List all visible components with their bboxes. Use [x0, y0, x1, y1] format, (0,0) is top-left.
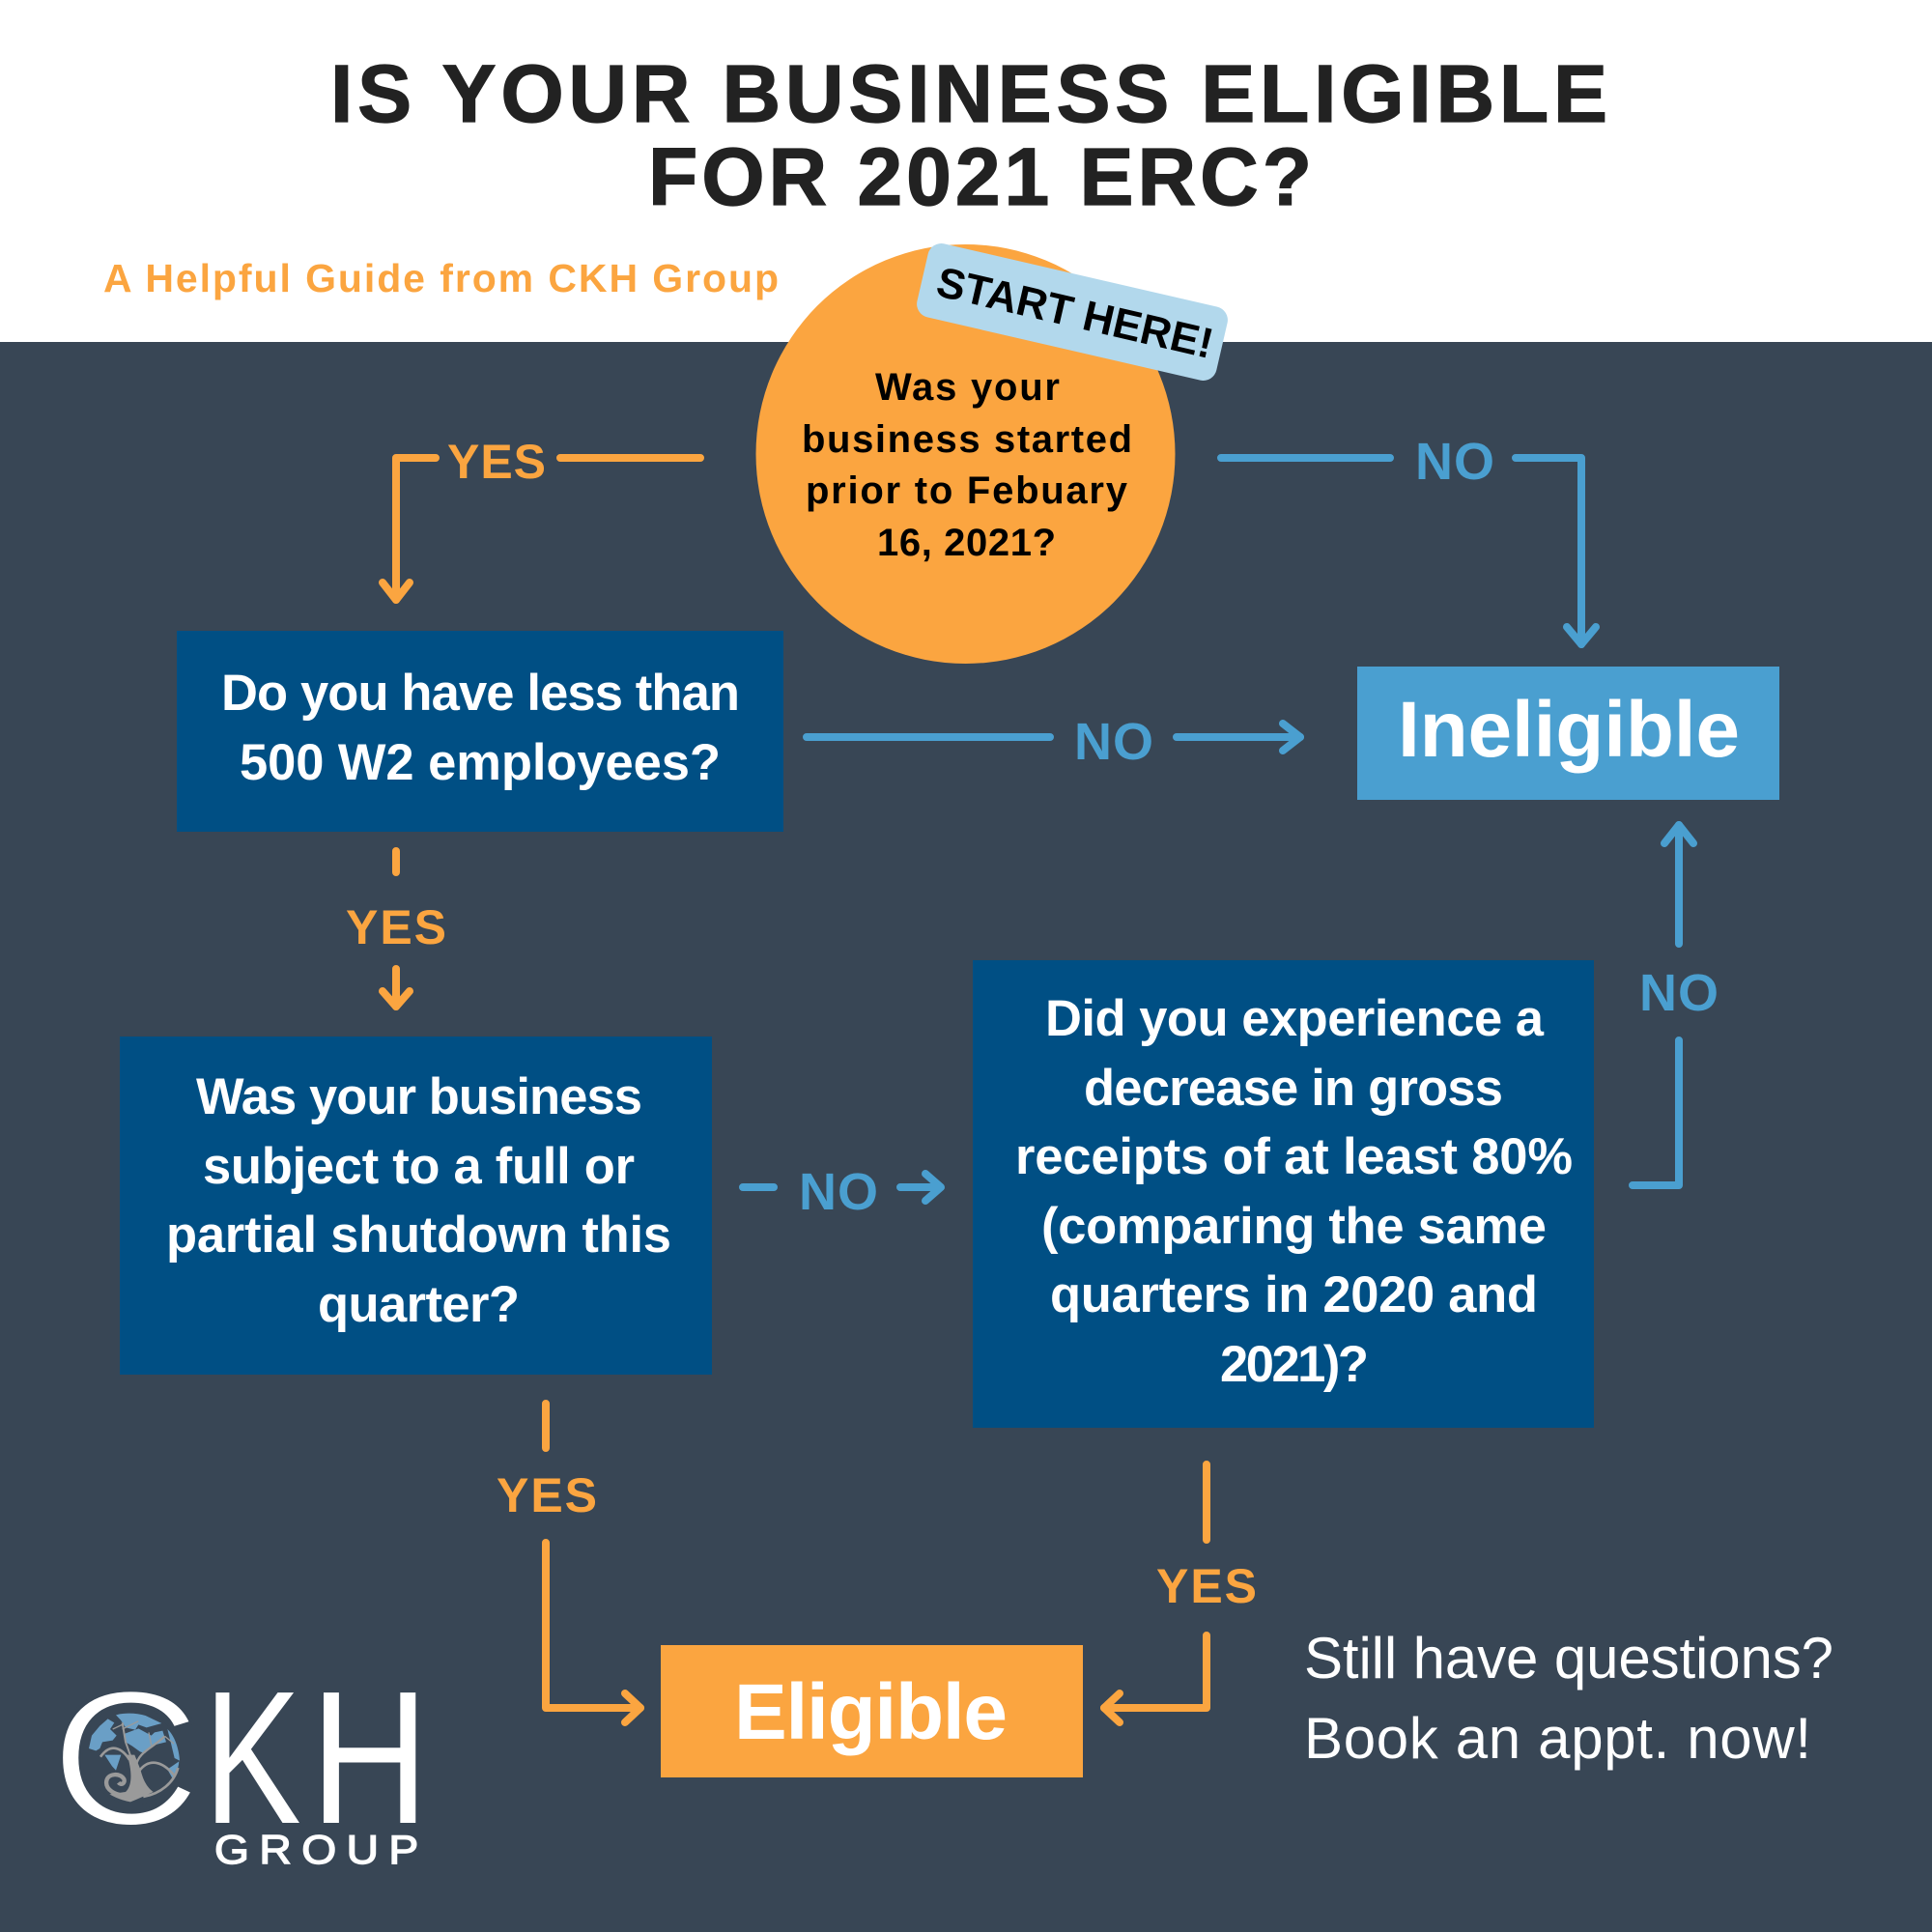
question box: employees: 500 W2 employees? [240, 734, 721, 791]
title: IS YOUR BUSINESS ELIGIBLE [330, 48, 1607, 139]
question box: gross receipts: quarters in 2020 and [1050, 1266, 1538, 1323]
CKH Group logo [50, 1651, 429, 1873]
arrow: no to ineligible from start [1221, 433, 1596, 644]
arrow: no to gross receipts question [743, 1163, 941, 1221]
arrow: no from employees to ineligible: NO [1074, 713, 1153, 771]
question box: shutdown: Was your business [196, 1068, 642, 1125]
question box: shutdown: quarter? [318, 1276, 520, 1333]
question box: gross receipts: (comparing the same [1041, 1198, 1547, 1255]
question box: gross receipts: decrease in gross [1084, 1060, 1503, 1117]
arrow: no to gross receipts question: NO [799, 1163, 878, 1221]
subtitle: A Helpful Guide from CKH Group [103, 256, 779, 300]
start here tag [914, 241, 1231, 384]
eligible box [661, 1645, 1083, 1777]
ineligible box [1357, 667, 1779, 800]
question box: shutdown [120, 1037, 712, 1375]
call to action text [1304, 1626, 1833, 1771]
start here tag: START HERE! [932, 258, 1218, 368]
start circle question: prior to Febuary [806, 469, 1128, 512]
question box: shutdown: subject to a full or [203, 1138, 635, 1195]
arrow: yes from shutdown to eligible: YES [497, 1468, 597, 1522]
arrow: yes to employees question: YES [447, 435, 546, 489]
question box: shutdown: partial shutdown this [166, 1207, 671, 1264]
call to action text: Still have questions? [1304, 1626, 1833, 1690]
question box: gross receipts [973, 960, 1594, 1428]
icon: globe and tree [88, 1712, 181, 1804]
question box: employees: Do you have less than [221, 665, 740, 722]
logo word GROUP: GROUP [214, 1828, 418, 1873]
start circle question: business started [802, 418, 1132, 461]
start circle question: Was your [875, 366, 1060, 409]
arrow: yes from gross receipts to eligible: YES [1156, 1559, 1257, 1613]
question box: gross receipts: 2021)? [1220, 1336, 1369, 1393]
logo letter K: K [204, 1653, 301, 1864]
ineligible box: Ineligible [1398, 686, 1740, 774]
arrow: yes from gross receipts to eligible [1104, 1464, 1257, 1722]
arrow: yes to shutdown question [346, 851, 446, 1007]
arrow: yes from shutdown to eligible [497, 1404, 640, 1722]
arrow: yes to employees question [383, 435, 700, 600]
title: FOR 2021 ERC? [648, 131, 1312, 222]
logo letter C: C [50, 1651, 201, 1866]
eligible box: Eligible [734, 1668, 1008, 1756]
start circle question: 16, 2021? [877, 522, 1056, 564]
question box: gross receipts: Did you experience a [1045, 990, 1545, 1047]
logo letter H: H [310, 1652, 429, 1863]
arrow: no from employees to ineligible [807, 713, 1300, 771]
question box: employees [177, 631, 783, 832]
arrow: yes to shutdown question: YES [346, 900, 446, 954]
start circle question [755, 244, 1175, 664]
question box: gross receipts: receipts of at least 80% [1015, 1128, 1573, 1185]
title [330, 48, 1607, 222]
arrow: no from gross receipts to ineligible [1633, 825, 1719, 1185]
call to action text: Book an appt. now! [1304, 1706, 1811, 1771]
arrow: no to ineligible from start: NO [1415, 433, 1494, 491]
arrow: no from gross receipts to ineligible: NO [1639, 964, 1719, 1022]
